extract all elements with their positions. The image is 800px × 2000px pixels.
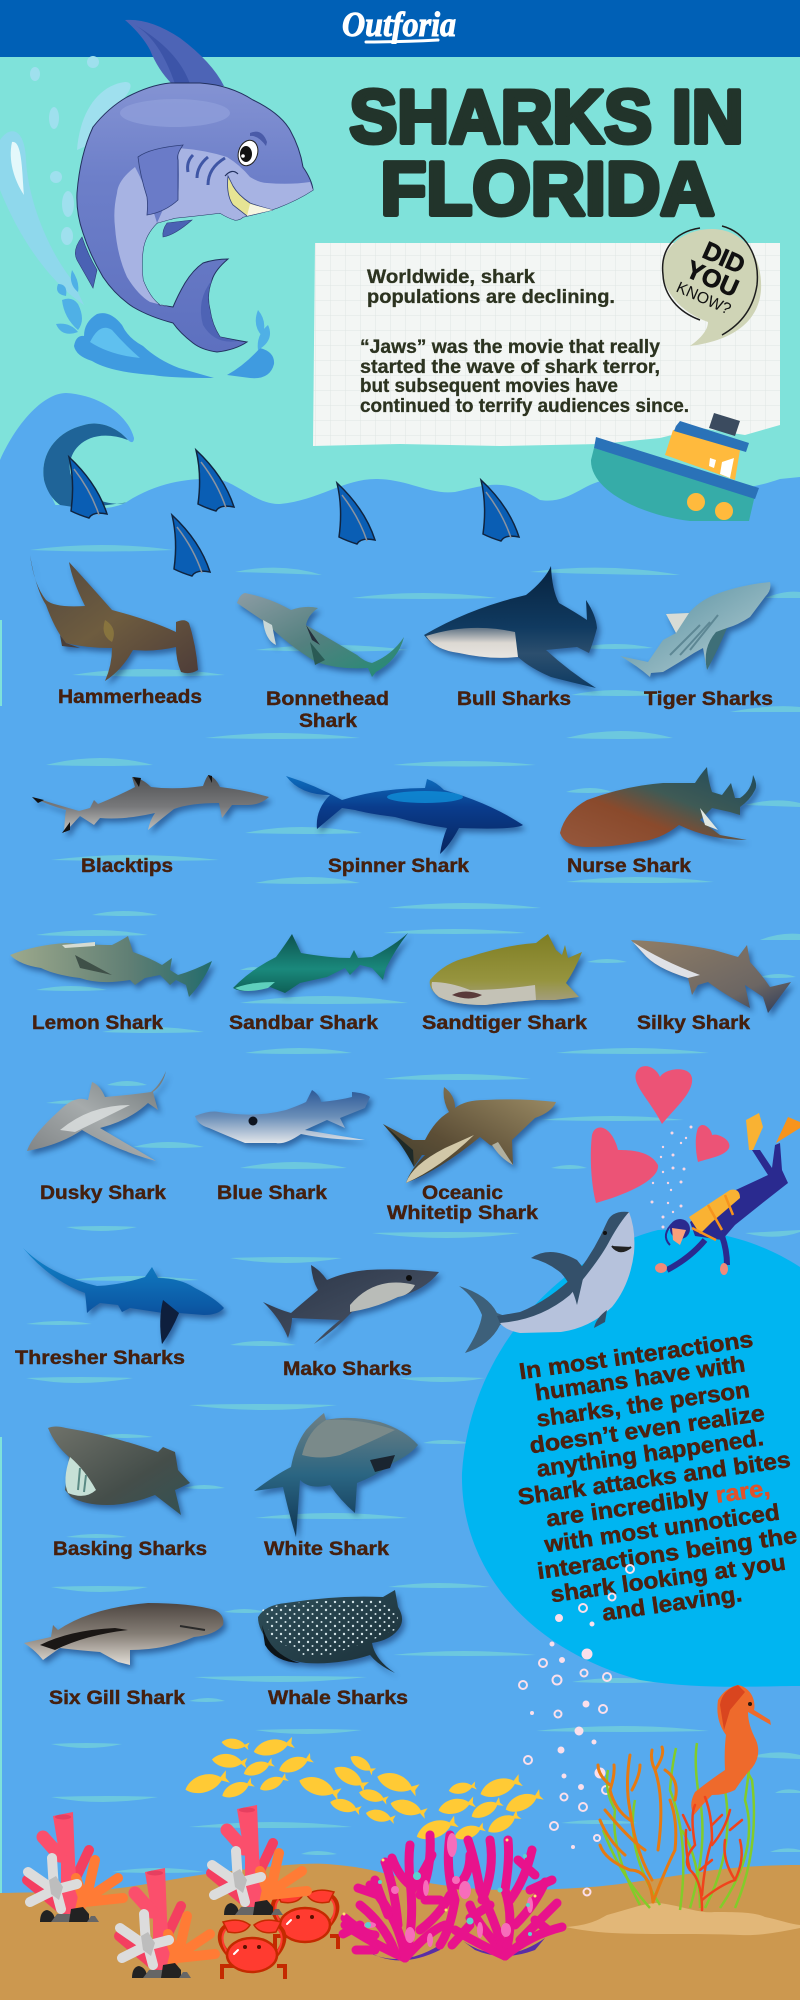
shark: sandtiger bbox=[430, 934, 582, 1005]
shark: whale bbox=[258, 1590, 402, 1673]
label: Bull Sharks: Bull Sharks bbox=[457, 689, 571, 710]
note text 2: continued to terrify audiences since. bbox=[360, 396, 689, 417]
label: Nurse Shark: Nurse Shark bbox=[567, 856, 691, 877]
callout text: sharks, the person bbox=[535, 1376, 751, 1432]
lower fin bbox=[594, 1310, 607, 1328]
shark: white bbox=[254, 1413, 418, 1537]
label: Mako Sharks: Mako Sharks bbox=[283, 1359, 412, 1380]
straps bbox=[692, 1195, 733, 1240]
label: Silky Shark: Silky Shark bbox=[637, 1013, 750, 1034]
note text 1: Worldwide, shark bbox=[367, 267, 535, 288]
pink coral reef bbox=[342, 1833, 562, 1960]
tank bbox=[689, 1190, 740, 1234]
body bbox=[77, 83, 313, 352]
shark: blue bbox=[195, 1090, 370, 1143]
eye bbox=[235, 132, 267, 168]
coral cluster 1 bbox=[27, 1812, 123, 1922]
callout text: shark looking at you bbox=[549, 1549, 787, 1607]
fins in water bbox=[69, 450, 519, 576]
coral cluster 2 bbox=[119, 1868, 215, 1978]
crab right bbox=[273, 1890, 338, 1949]
shark: hammerhead bbox=[30, 555, 198, 681]
label: Six Gill Shark: Six Gill Shark bbox=[49, 1688, 185, 1709]
dorsal fin bbox=[531, 1252, 585, 1305]
mound of sand bbox=[566, 1903, 800, 1935]
label: Tiger Sharks: Tiger Sharks bbox=[644, 689, 773, 710]
diver bbox=[655, 1113, 800, 1275]
highlights bbox=[364, 1833, 533, 1947]
deck stripe bbox=[594, 437, 759, 499]
dorsal fin bbox=[125, 20, 224, 86]
shark: basking bbox=[48, 1426, 190, 1515]
note text 2: but subsequent movies have bbox=[360, 376, 618, 397]
cartoon shark jumping bbox=[75, 20, 313, 352]
note text 1: populations are declining. bbox=[367, 287, 615, 308]
shark: mako bbox=[263, 1265, 439, 1344]
label: White Shark: White Shark bbox=[264, 1539, 389, 1560]
callout text: In most interactions bbox=[517, 1326, 755, 1384]
belly bbox=[114, 167, 170, 307]
did you know bubble: DID bbox=[698, 237, 749, 280]
rear fin bbox=[75, 237, 97, 288]
hull bbox=[591, 448, 755, 521]
logo: Outforia: Outforia bbox=[342, 5, 456, 44]
title bbox=[350, 74, 744, 230]
wave streaks bbox=[26, 545, 800, 1873]
label: Basking Sharks: Basking Sharks bbox=[53, 1539, 207, 1560]
edge line bbox=[0, 620, 2, 1893]
callout text: and leaving. bbox=[600, 1580, 744, 1626]
label: Whale Sharks: Whale Sharks bbox=[268, 1688, 408, 1709]
shark: sandbar bbox=[233, 933, 408, 993]
did you know bubble: KNOW? bbox=[673, 279, 733, 318]
label: Dusky Shark: Dusky Shark bbox=[40, 1183, 166, 1204]
note text 1 bbox=[367, 267, 615, 308]
chimney bbox=[709, 413, 740, 436]
label: Oceanic Whitetip Shark: Whitetip Shark bbox=[387, 1203, 538, 1224]
purple base bbox=[363, 1938, 545, 1960]
shark: thresher bbox=[23, 1248, 224, 1344]
flippers bbox=[746, 1113, 763, 1150]
label: Thresher Sharks: Thresher Sharks bbox=[15, 1348, 185, 1369]
did you know bubble: YOU bbox=[682, 255, 743, 303]
callout text: are incredibly rare, bbox=[544, 1474, 772, 1532]
note text 2: “Jaws” was the movie that really bbox=[360, 337, 660, 358]
shark: bonnethead bbox=[237, 593, 404, 677]
yellow tips bbox=[342, 1838, 536, 1916]
shark: blacktips bbox=[32, 775, 269, 833]
eye bbox=[603, 1231, 607, 1235]
red branching coral bbox=[683, 1797, 742, 1910]
title: SHARKS IN bbox=[350, 74, 744, 158]
note text 2 bbox=[360, 337, 689, 417]
shark: lemon bbox=[10, 936, 212, 997]
orange branching coral bbox=[598, 1747, 676, 1902]
water splash behind cartoon shark bbox=[0, 56, 274, 378]
big curling wave bbox=[0, 393, 134, 560]
back bbox=[497, 1212, 629, 1323]
bubbles lower stream bbox=[519, 1565, 634, 1896]
pectoral fin bbox=[138, 145, 183, 215]
shark: spinner bbox=[286, 776, 523, 854]
shark: nurse bbox=[560, 767, 756, 847]
cartoon shark smiling bbox=[459, 1212, 634, 1353]
label: Bonnethead Shark: Shark bbox=[299, 711, 357, 732]
teal dots bbox=[365, 1854, 532, 1936]
callout text: interactions being the bbox=[535, 1522, 799, 1584]
belly bbox=[500, 1212, 634, 1333]
head bbox=[670, 1219, 690, 1239]
label: Oceanic Whitetip Shark: Oceanic bbox=[422, 1183, 503, 1204]
callout text: anything happened. bbox=[535, 1424, 765, 1482]
blue callout blob bbox=[462, 1230, 800, 1687]
smile bbox=[612, 1246, 631, 1251]
label: Oceanic Whitetip Shark bbox=[387, 1183, 538, 1224]
shark: silky bbox=[631, 940, 791, 1013]
note text 2: started the wave of shark terror, bbox=[360, 357, 660, 378]
hands bbox=[655, 1263, 667, 1273]
label: Sandbar Shark: Sandbar Shark bbox=[229, 1013, 378, 1034]
coral cluster 3 bbox=[211, 1805, 307, 1915]
bubbles upper bbox=[650, 1126, 692, 1254]
legs and body bbox=[690, 1143, 788, 1240]
label: Blue Shark: Blue Shark bbox=[217, 1183, 327, 1204]
back highlight bbox=[120, 99, 230, 127]
portholes bbox=[687, 493, 705, 511]
cabin roof bbox=[674, 421, 749, 452]
label: Bonnethead Shark: Bonnethead bbox=[266, 689, 389, 710]
boat bbox=[591, 413, 759, 521]
green seaweed bbox=[603, 1743, 754, 1910]
arms bbox=[667, 1236, 727, 1270]
gills bbox=[188, 155, 225, 185]
did you know bubble bbox=[662, 226, 761, 346]
callout text: Shark attacks and bites bbox=[516, 1446, 792, 1510]
label: Spinner Shark: Spinner Shark bbox=[328, 856, 469, 877]
header bar bbox=[0, 0, 800, 57]
lower fin bbox=[163, 220, 192, 237]
school of yellow fish bbox=[183, 1735, 544, 1844]
paper note bbox=[313, 243, 780, 446]
snout bbox=[157, 148, 313, 223]
callout text: doesn’t even realize bbox=[528, 1400, 766, 1458]
seahorse bbox=[691, 1685, 771, 1815]
tail bbox=[459, 1286, 510, 1353]
window bbox=[709, 458, 734, 478]
cabin bbox=[665, 430, 740, 480]
label: Sandtiger Shark: Sandtiger Shark bbox=[422, 1013, 587, 1034]
branches bbox=[343, 1835, 562, 1958]
shark: oceanic whitetip bbox=[383, 1087, 556, 1183]
hearts bbox=[591, 1066, 729, 1203]
ocean water bbox=[0, 477, 800, 2000]
shark: bull bbox=[424, 566, 597, 688]
title: FLORIDA bbox=[380, 146, 714, 230]
shark: dusky bbox=[27, 1071, 166, 1161]
callout text bbox=[516, 1326, 799, 1626]
shark: tiger bbox=[620, 582, 770, 677]
tail shading bbox=[201, 280, 238, 342]
shark: six gill bbox=[24, 1603, 223, 1665]
sand floor bbox=[0, 1864, 800, 2000]
callout text: humans have with bbox=[533, 1350, 747, 1406]
callout text: with most unnoticed bbox=[542, 1499, 781, 1558]
label: Lemon Shark: Lemon Shark bbox=[32, 1013, 163, 1034]
label: Blacktips: Blacktips bbox=[81, 856, 173, 877]
teeth bbox=[228, 176, 273, 216]
label: Hammerheads: Hammerheads bbox=[58, 687, 202, 708]
label: Bonnethead Shark bbox=[266, 689, 389, 732]
crab left bbox=[220, 1920, 285, 1979]
